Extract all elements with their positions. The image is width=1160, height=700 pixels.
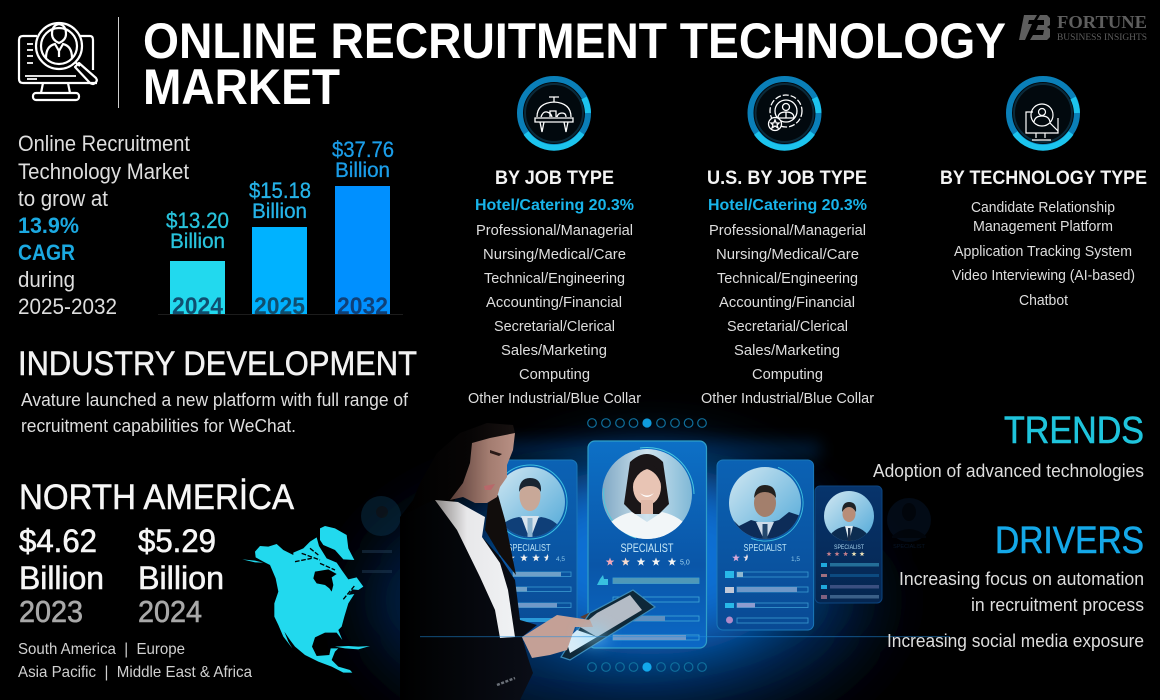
north america stats: $5.29 [138,523,216,559]
woman with tablet [400,423,950,700]
bar 2025 [249,178,311,320]
bar chart: market size [158,137,403,320]
faint reflected card [361,496,401,573]
north america stats: 2023 [19,594,83,629]
bar 2024 [166,208,229,320]
list: U.S. by job type: Professional/Managerial [709,222,866,239]
drivers: DRIVERS [995,520,1144,562]
header divider [118,17,119,108]
jacket buttons [497,678,515,685]
candidate card left: 4,5 [556,556,565,563]
face [450,433,515,503]
list: U.S. by job type: Secretarial/Clerical [727,318,848,335]
title: MARKET [143,59,340,115]
header icon: monitor with magnifier [19,23,97,100]
jacket [400,500,537,700]
CAGR summary text: to grow at [18,186,108,211]
candidate card right: SPECIALIST [744,543,786,554]
map: North America [242,526,370,673]
list: by job type: Sales/Marketing [501,342,607,359]
list: by job type: BY JOB TYPE [495,168,614,189]
candidate card centre: 5,0 [680,560,690,566]
trends: TRENDS [1004,410,1144,452]
list: by job type: Accounting/Financial [486,294,622,311]
bar 2024: $13.20 [166,208,229,233]
list: by job type: Other Industrial/Blue Collar [468,390,641,407]
list: U.S. by job type: Other Industrial/Blue Collar [701,390,874,407]
title [143,13,1006,115]
title: ONLINE RECRUITMENT TECHNOLOGY [143,13,1006,69]
CAGR summary text: during [18,267,75,292]
fingers behind tablet [580,603,610,620]
drivers: Increasing focus on automation [899,569,1144,589]
hair [400,423,515,540]
list: by job type: Computing [519,366,590,383]
logo: Fortune Business Insights: BUSINESS INSIGHTS [1057,33,1147,43]
pagination dots bottom [588,662,706,672]
bar 2032: $37.76 [332,137,394,162]
candidate card right: 1,5 [791,556,800,563]
north america stats [18,478,295,681]
list: by job type: Nursing/Medical/Care [483,246,626,263]
list: U.S. by job type: Technical/Engineering [717,270,858,287]
list: by technology type: BY TECHNOLOGY TYPE [940,168,1147,189]
drivers [887,520,1144,651]
list: U.S. by job type: Nursing/Medical/Care [716,246,859,263]
CAGR summary text: Online Recruitment [18,131,190,156]
candidate card far right [815,486,882,603]
shirt [435,500,515,638]
trends: Adoption of advanced technologies [873,461,1144,481]
list: U.S. by job type: Computing [752,366,823,383]
list: by job type: Professional/Managerial [476,222,633,239]
north america stats: NORTH AMERİCA [19,478,295,517]
candidate card left [493,460,577,640]
industry development [18,345,417,436]
list: by job type [468,168,641,407]
candidate card centre: SPECIALIST [620,541,674,555]
faint fifth card [887,498,931,550]
icon: by technology type [1009,79,1077,148]
light streak [420,636,950,637]
hero photo: recruiter browsing candidate cards [361,418,950,700]
CAGR summary text [18,131,190,319]
candidate card left: SPECIALIST [508,543,550,554]
blue glow backdrop [370,442,870,700]
drivers: Increasing social media exposure [887,631,1144,651]
north america stats: South America | Europe [18,641,185,658]
bar 2025: $15.18 [249,178,311,203]
faint fifth card: SPECIALIST [893,544,926,550]
north america stats: 2024 [138,594,202,629]
list: by technology type: Candidate Relationship [971,199,1115,216]
bar 2025: Billion [252,200,307,223]
icon: by job type [520,79,588,148]
list: by technology type: Management Platform [973,218,1113,235]
candidate card centre [588,441,706,648]
north america stats: $4.62 [19,523,97,559]
list: by job type: Hotel/Catering 20.3% [475,197,634,214]
north america stats: Billion [138,560,224,596]
industry development: INDUSTRY DEVELOPMENT [18,345,417,383]
logo: Fortune Business Insights [1019,12,1147,43]
bar 2032: 2032 [337,293,388,320]
industry development: Avature launched a new platform with full range of [21,390,409,410]
bar 2032: Billion [335,159,390,182]
CAGR summary text: CAGR [18,240,75,265]
icon: U.S. by job type [750,79,818,148]
list: by technology type: Video Interviewing (AI-based) [952,267,1135,284]
tablet [561,590,655,660]
CAGR summary text: 13.9% [18,213,79,238]
bar 2024: 2024 [172,293,224,320]
list: U.S. by job type: Sales/Marketing [734,342,840,359]
trends [873,410,1144,481]
list: by job type: Secretarial/Clerical [494,318,615,335]
logo: Fortune Business Insights: FORTUNE [1057,12,1147,32]
list: by job type: Technical/Engineering [484,270,625,287]
list: by technology type: Application Tracking System [954,243,1132,260]
drivers: in recruitment process [971,595,1144,615]
list: U.S. by job type [701,168,874,407]
CAGR summary text: Technology Market [18,159,189,184]
tablet glow [580,629,608,643]
candidate card right [716,454,814,630]
bar 2025: 2025 [254,293,305,320]
list: by technology type [940,168,1147,309]
bar 2024: Billion [170,230,225,253]
industry development: recruitment capabilities for WeChat. [21,416,296,436]
list: U.S. by job type: Hotel/Catering 20.3% [708,197,867,214]
north america stats: Billion [19,560,104,596]
list: U.S. by job type: Accounting/Financial [719,294,855,311]
candidate card far right: SPECIALIST [834,544,864,551]
list: U.S. by job type: U.S. BY JOB TYPE [707,168,867,189]
north america stats: Asia Pacific | Middle East & Africa [18,664,252,681]
bar 2032 [332,137,394,320]
hand [522,615,593,658]
list: by technology type: Chatbot [1019,292,1069,309]
pagination dots top [588,418,706,428]
CAGR summary text: 2025-2032 [18,294,117,319]
